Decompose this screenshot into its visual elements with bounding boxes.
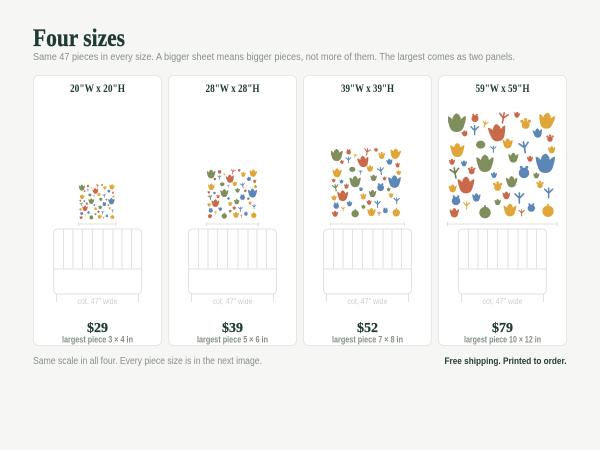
width marker xyxy=(330,222,404,226)
wall decal sheet xyxy=(447,111,556,218)
cot outline xyxy=(54,229,142,302)
cot outline xyxy=(188,229,276,302)
panel: 39 by 39 size xyxy=(304,76,432,346)
panel: 20 by 20 size xyxy=(34,76,162,346)
width marker xyxy=(78,222,116,226)
size heading: 39"W x 39"H xyxy=(341,83,394,95)
panel: 59 by 59 size xyxy=(438,76,566,346)
price: $52 xyxy=(357,321,378,336)
panel: 28 by 28 size xyxy=(168,76,296,346)
largest piece: largest piece 3 × 4 in xyxy=(62,334,133,344)
scale note: Same scale in all four. Every piece size is in the next image. xyxy=(33,356,262,367)
wall decal sheet xyxy=(331,147,401,217)
shipping note: Free shipping. Printed to order. xyxy=(444,356,566,367)
price: $79 xyxy=(492,321,513,336)
cot label: cot, 47" wide xyxy=(212,296,253,306)
price: $29 xyxy=(87,321,108,336)
cot outline xyxy=(458,229,546,302)
cot label: cot, 47" wide xyxy=(348,296,388,306)
cot label: cot, 47" wide xyxy=(78,296,118,306)
width marker xyxy=(448,222,558,226)
largest piece: largest piece 10 × 12 in xyxy=(464,334,541,344)
price: $39 xyxy=(222,321,243,336)
wall decal sheet xyxy=(207,169,257,219)
cot label: cot, 47" wide xyxy=(482,296,523,306)
size heading: 59"W x 59"H xyxy=(476,83,530,95)
cot outline xyxy=(324,229,412,302)
size heading: 28"W x 28"H xyxy=(206,83,260,95)
size heading: 20"W x 20"H xyxy=(70,83,125,95)
title: Four sizes xyxy=(33,25,125,52)
subtitle: Same 47 pieces in every size. A bigger sheet means bigger pieces, not more of them. The largest comes as two panels. xyxy=(33,52,515,63)
largest piece: largest piece 7 × 8 in xyxy=(332,334,403,344)
largest piece: largest piece 5 × 6 in xyxy=(197,334,268,344)
wall decal sheet xyxy=(79,184,115,219)
width marker xyxy=(206,222,258,226)
